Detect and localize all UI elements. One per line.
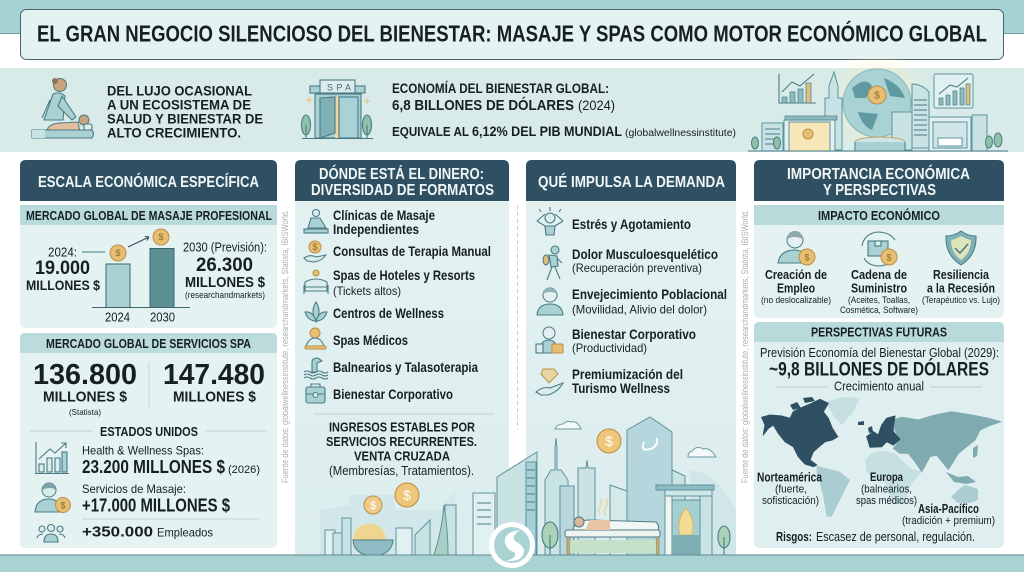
icon: elderly person (537, 288, 563, 315)
map labels: spas médicos) (856, 495, 917, 507)
panel: escala económica (20, 160, 277, 201)
message: from luxury to ecosystem: DEL LUJO OCASIONAL (107, 82, 252, 98)
bar chart: $ (158, 232, 164, 242)
panel: mercado de servicios spa: MILLONES $ (43, 388, 128, 406)
illustration: spa city skyline: $ (605, 433, 613, 449)
callout: recurring revenue: INGRESOS ESTABLES POR (329, 420, 476, 434)
panel: impacto económico: (Terapéutico vs. Lujo) (922, 295, 1000, 305)
title (20, 10, 1004, 60)
panel: mercado de masaje (20, 205, 277, 328)
heading: dónde está el dinero: DÓNDE ESTÁ EL DINERO: (319, 165, 484, 183)
panel: mercado de servicios spa: MILLONES $ (173, 388, 257, 406)
icon: person with coin: $ (60, 500, 66, 510)
list: demand drivers: Estrés y Agotamiento (572, 216, 691, 232)
panel: mercado de masaje: MILLONES $ (26, 277, 100, 293)
panel: mercado de servicios spa: +17.000 MILLONES $ (82, 496, 230, 516)
panel: impacto económico: a la Recesión (927, 280, 995, 296)
heading: dónde está el dinero (311, 165, 494, 199)
panel: mercado de servicios spa: Empleados (157, 526, 213, 540)
panel: mercado de servicios spa: Health & Wellness Spas: (82, 444, 204, 458)
icon: waves (304, 358, 328, 379)
map labels: Europa (870, 470, 903, 484)
panel: impacto económico: Cadena de (851, 267, 907, 282)
icon: job creation: $ (804, 252, 810, 262)
map labels: sofisticación) (762, 495, 819, 507)
panel: perspectivas futuras (754, 322, 1004, 548)
heading: qué impulsa la demanda: QUÉ IMPULSA LA DEMANDA (538, 174, 725, 191)
icon: supply chain (862, 232, 897, 266)
list: demand drivers: Turismo Wellness (572, 380, 670, 396)
global wellness economy text (392, 80, 736, 139)
map labels: Norteamérica (757, 470, 823, 484)
icon: growth chart (35, 442, 69, 474)
panel: mercado de servicios spa: ESTADOS UNIDOS (100, 424, 198, 439)
icon: medical spa (305, 328, 326, 349)
list: business formats (304, 207, 491, 403)
list: demand drivers: Premiumización del (572, 366, 683, 382)
illustration: global city skyline: $ (874, 90, 880, 102)
global wellness economy text: 6,8 BILLONES DE DÓLARES (392, 96, 574, 114)
icon: spa building: SPA (327, 82, 351, 92)
icon: supply chain: $ (886, 252, 892, 262)
panel: mercado de servicios spa: Servicios de Masaje: (82, 482, 186, 496)
global wellness economy text: ECONOMÍA DEL BIENESTAR GLOBAL: (392, 80, 609, 96)
callout: recurring revenue: VENTA CRUZADA (354, 448, 451, 464)
list: demand drivers (536, 207, 727, 396)
map labels: Asia-Pacífico (918, 502, 979, 516)
bar chart (92, 229, 190, 324)
world map (762, 397, 1001, 517)
callout: recurring revenue: SERVICIOS RECURRENTES. (326, 434, 477, 449)
icon: massage clinic (304, 210, 328, 233)
list: demand drivers: (Recuperación preventiva) (572, 261, 702, 275)
global wellness economy text: (globalwellnessinstitute) (625, 128, 736, 139)
map labels: (tradición + premium) (902, 515, 995, 527)
source note left: Fuente de datos: globalwellnessinstitute, researchandmarkets, Statista, IBISWorld. (280, 210, 290, 483)
icon: massage therapist (32, 78, 94, 138)
list: demand drivers: Dolor Musculoesquelético (572, 246, 718, 262)
icon: group of people (37, 524, 65, 542)
icon: diamond on hand (536, 369, 563, 395)
icon: briefcase (306, 384, 325, 403)
logo (489, 522, 535, 568)
dashed divider (516, 205, 518, 430)
list: business formats: Consultas de Terapia Manual (333, 243, 491, 259)
heading: dónde está el dinero: DIVERSIDAD DE FORMATOS (311, 182, 494, 199)
icon: spa building (302, 80, 373, 138)
icon: stress (537, 207, 563, 235)
bar chart: 2024 (105, 310, 130, 324)
panel: mercado de masaje: 19.000 (35, 258, 90, 279)
panel: perspectivas futuras: PERSPECTIVAS FUTURAS (811, 324, 947, 340)
callout: recurring revenue: (Membresías, Tratamientos). (329, 463, 474, 478)
panel: impacto económico (754, 205, 1004, 318)
icon: wellness lotus (305, 302, 327, 322)
map labels: (fuerte, (775, 484, 807, 496)
map labels (757, 470, 995, 527)
bar chart: $ (115, 248, 121, 258)
heading: importancia económica (787, 165, 970, 199)
callout: recurring revenue (326, 420, 477, 478)
panel: mercado de servicios spa: 147.480 (163, 359, 265, 391)
panel: importancia económica (754, 160, 1004, 201)
heading: importancia económica: Y PERSPECTIVAS (823, 182, 936, 199)
panel: mercado de servicios spa: +350.000 (82, 524, 153, 540)
source note right: Fuente de datos: globalwellnessinstitute, researchandmarkets, Statista, IBISWorld. (740, 210, 750, 483)
panel: impacto económico: IMPACTO ECONÓMICO (818, 208, 940, 223)
icon: job creation (778, 231, 815, 265)
panel: mercado de masaje: 2030 (Previsión): (183, 240, 267, 254)
panel: impacto económico: Resiliencia (933, 267, 990, 282)
risks (776, 529, 975, 544)
panel: mercado de masaje: MERCADO GLOBAL DE MASAJE PROFESIONAL (26, 208, 272, 223)
list: business formats: Spas Médicos (333, 332, 408, 348)
map labels: (balnearios, (861, 484, 912, 496)
list: demand drivers: Bienestar Corporativo (572, 326, 696, 342)
panel: mercado de masaje: MILLONES $ (185, 274, 266, 291)
panel: qué impulsa la demanda (526, 160, 736, 555)
list: business formats: Balnearios y Talasoterapia (333, 359, 478, 375)
illustration: spa city skyline: $ (370, 500, 376, 512)
global wellness economy text: EQUIVALE AL (392, 124, 469, 139)
panel: impacto económico: Cosmética, Software) (840, 305, 918, 315)
global wellness economy text: 6,12% DEL PIB MUNDIAL (472, 123, 622, 139)
panel: impacto económico: Suministro (851, 280, 907, 296)
list: business formats: (Tickets altos) (333, 284, 401, 298)
list: business formats: Spas de Hoteles y Resorts (333, 267, 475, 283)
icon: person with coin (35, 483, 70, 512)
list: business formats: Bienestar Corporativo (333, 386, 453, 402)
risks: Risgos: (776, 529, 812, 544)
list: demand drivers: (Productividad) (572, 341, 647, 355)
icon: shield (946, 231, 976, 265)
panel: mercado de servicios spa: MERCADO GLOBAL DE SERVICIOS SPA (46, 336, 251, 351)
panel: mercado de servicios spa: (Statista) (69, 408, 101, 417)
list: business formats: Clínicas de Masaje (333, 207, 435, 223)
risks: Escasez de personal, regulación. (816, 529, 975, 544)
top teal band (0, 0, 1024, 34)
global wellness economy text: (2024) (578, 97, 615, 113)
message: from luxury to ecosystem: SALUD Y BIENESTAR DE (107, 110, 263, 126)
list: demand drivers: Envejecimiento Poblacional (572, 286, 727, 302)
icon: muscle pain (543, 246, 562, 280)
list: business formats: Centros de Wellness (333, 305, 444, 321)
icon: hand with coin (304, 241, 326, 262)
panel: dónde está el dinero (295, 160, 509, 555)
panel: mercado de servicios spa: (2026) (228, 464, 260, 476)
panel: impacto económico: Empleo (777, 280, 815, 296)
message: from luxury to ecosystem (107, 82, 263, 140)
panel: impacto económico: Creación de (765, 267, 827, 282)
message: from luxury to ecosystem: A UN ECOSISTEMA DE (107, 96, 251, 112)
bar chart: 2030 (150, 310, 175, 324)
panel: perspectivas futuras: Crecimiento anual (834, 378, 924, 394)
icon: hotel bed (304, 270, 328, 294)
intro band (0, 68, 1024, 152)
list: demand drivers: (Movilidad, Alivio del dolor) (572, 302, 707, 316)
illustration: spa city skyline: $ (403, 487, 411, 503)
message: from luxury to ecosystem: ALTO CRECIMIENTO. (107, 124, 241, 140)
heading: escala económica específica: ESCALA ECONÓMICA ESPECÍFICA (38, 172, 259, 191)
icon: hand with coin: $ (312, 242, 318, 252)
footer band (0, 554, 1024, 572)
panel: mercado de masaje: 2024: (48, 244, 77, 260)
panel: impacto económico: (no deslocalizable) (761, 295, 831, 305)
panel: mercado de servicios spa: 136.800 (33, 359, 137, 391)
panel: mercado de servicios spa: 23.200 MILLONES $ (82, 457, 225, 477)
panel: impacto económico: (Aceites, Toallas, (848, 295, 910, 305)
heading: importancia económica: IMPORTANCIA ECONÓMICA (787, 165, 970, 183)
illustration: global city skyline (748, 51, 1008, 155)
illustration: spa city skyline (320, 417, 736, 555)
panel: mercado de masaje: 26.300 (196, 255, 253, 276)
icon: corporate worker (536, 327, 563, 353)
panel: mercado de servicios spa (20, 333, 277, 548)
panel: mercado de masaje: (researchandmarkets) (185, 290, 265, 301)
list: business formats: Independientes (333, 221, 419, 237)
